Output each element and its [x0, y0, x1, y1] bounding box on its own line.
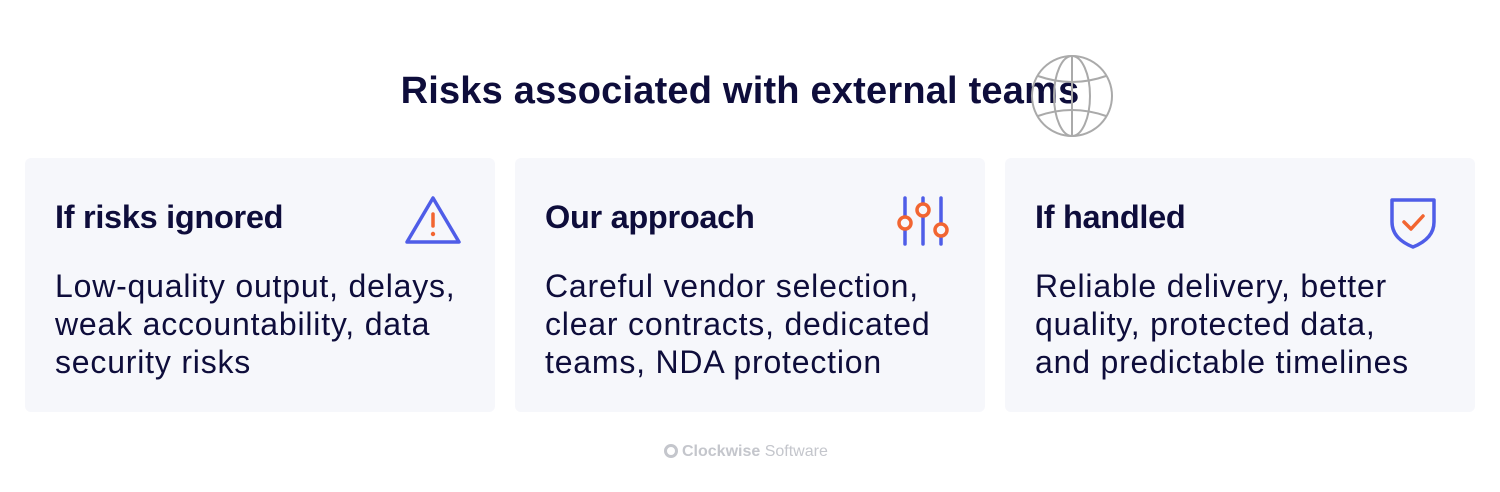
- heading: Our approach: [545, 199, 754, 235]
- body text: [1035, 268, 1409, 380]
- body text: teams, NDA protection: [545, 344, 882, 380]
- heading: If risks ignored: [55, 199, 283, 235]
- panel: our approach: [515, 158, 985, 412]
- title: Risks associated with external teams: [401, 70, 1079, 112]
- icon: shield check: [1390, 198, 1436, 249]
- body text: weak accountability, data: [55, 306, 430, 342]
- body text: quality, protected data,: [1035, 306, 1376, 342]
- panel: if risks ignored: [25, 158, 495, 412]
- icon: sliders: [897, 196, 949, 246]
- icon: globe: [1031, 55, 1113, 137]
- body text: [545, 268, 930, 380]
- icon: warning: [405, 196, 461, 244]
- heading: If handled: [1035, 199, 1185, 235]
- body text: Reliable delivery, better: [1035, 268, 1387, 304]
- body text: Careful vendor selection,: [545, 268, 919, 304]
- body text: [55, 268, 456, 380]
- panel: if handled: [1005, 158, 1475, 412]
- body text: Low-quality output, delays,: [55, 268, 456, 304]
- logo: Clockwise Software: [682, 443, 828, 460]
- body text: clear contracts, dedicated: [545, 306, 930, 342]
- body text: and predictable timelines: [1035, 344, 1409, 380]
- body text: security risks: [55, 344, 251, 380]
